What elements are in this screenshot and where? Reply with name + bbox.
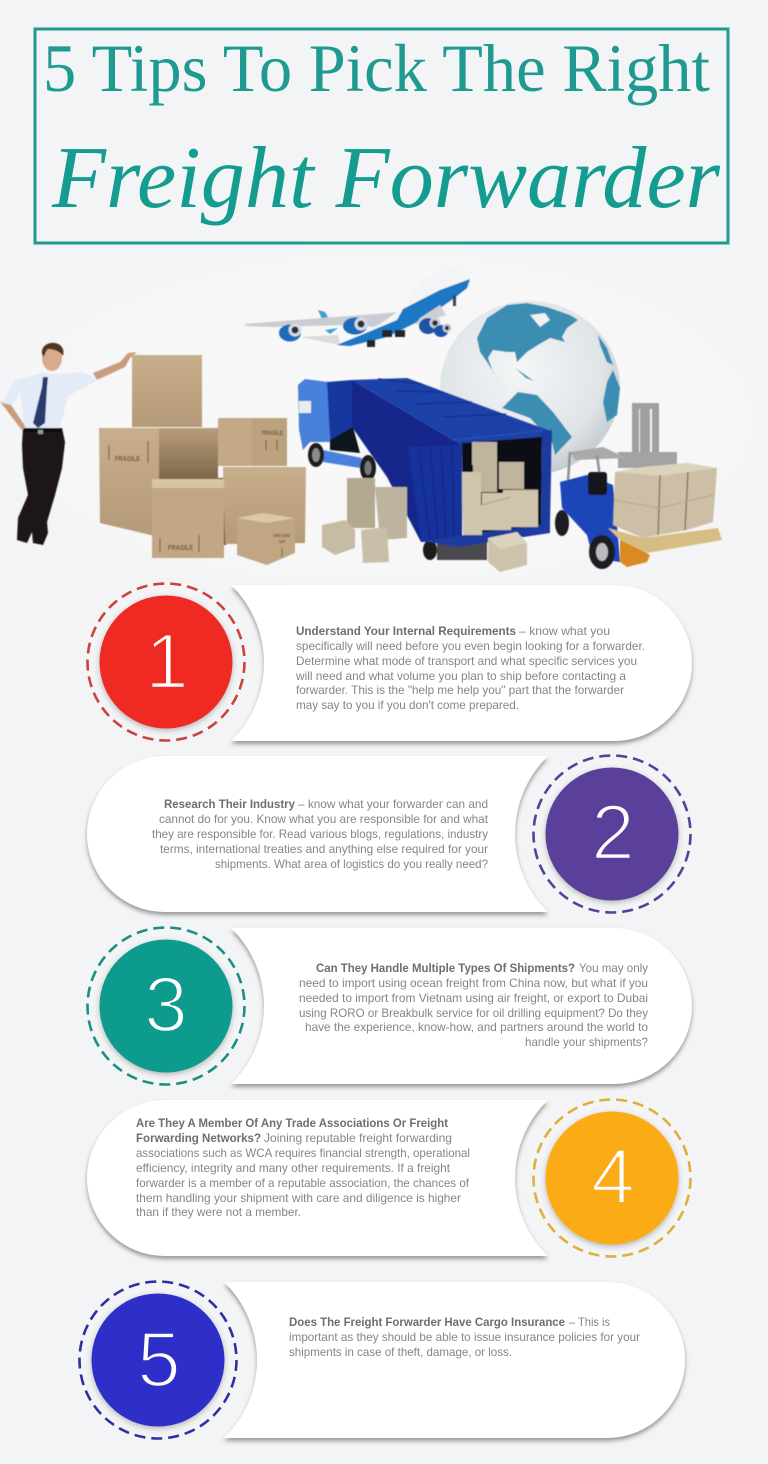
icon: globe [440, 301, 620, 475]
tip 1 text [295, 624, 645, 712]
number badge 3: 3 [144, 960, 188, 1048]
panel 3 [88, 928, 692, 1084]
tip 1 text: may say to you if you don't come prepared. [296, 698, 519, 712]
tip 3 text: needed to import from Vietnam using air freight, or export to Dubai [299, 991, 648, 1005]
tip 1 text: specifically will need before you even begin looking for a forwarder. [296, 639, 645, 653]
icon: forklift [555, 403, 722, 569]
tip 1 text: forwarder. This is the "help me help you" part that the forwarder [296, 683, 624, 697]
tip 2 text: they are responsible for. Read various blogs, regulations, industry [152, 827, 488, 841]
icon: cardboard boxes: UP [279, 539, 285, 544]
panel 5 [80, 1282, 685, 1438]
tip 2 text [152, 797, 489, 871]
tip 4 text: Joining reputable freight forwarding [264, 1131, 452, 1145]
number badge 5: 5 [137, 1315, 181, 1403]
tip 4 text: Are They A Member Of Any Trade Associations Or Freight [136, 1116, 448, 1130]
tip 2 text: terms, international treaties and anything else required for your [160, 842, 488, 856]
tip 4 text: than if they were not a member. [136, 1205, 301, 1219]
tip 3 text: You may only [579, 961, 648, 975]
tip 5 text: Does The Freight Forwarder Have Cargo Insurance [289, 1315, 565, 1329]
title box [35, 29, 728, 243]
tip 5 text: important as they should be able to issue insurance policies for your [289, 1330, 640, 1344]
tip 4 text: them handling your shipment with care and diligence is higher [136, 1191, 461, 1205]
box labels: FRAGILE [115, 456, 140, 463]
tip 4 text: associations such as WCA requires financial strength, operational [136, 1146, 470, 1160]
number badge 4: 4 [591, 1132, 635, 1220]
tip 5 text: shipments in case of theft, damage, or loss. [289, 1345, 512, 1359]
number badge 1 [88, 584, 244, 740]
logistics illustration [2, 267, 722, 572]
tip 3 text [299, 961, 648, 1049]
tip 3 text: have the experience, know-how, and partners around the world to [305, 1020, 648, 1034]
title line 2: Freight Forwarder [51, 130, 721, 227]
tip 2 text: Research Their Industry [164, 797, 295, 811]
tip 5 text [289, 1315, 640, 1359]
panel 4 [87, 1100, 690, 1256]
number badge 3 [88, 928, 244, 1084]
number badge 2: 2 [591, 788, 635, 876]
number badge 4 [534, 1100, 690, 1256]
tip 1 text: – know what you [519, 624, 610, 638]
tip 1 text: Determine what mode of transport and what specific services you [296, 654, 637, 668]
tip 4 text [136, 1116, 470, 1219]
tip 3 text: need to import using ocean freight from China now, but what if you [299, 976, 648, 990]
panel 2 [87, 756, 690, 912]
tip 3 text: handle your shipments? [525, 1035, 648, 1049]
tip 4 text: forwarder is a member of a reputable association, the chances of [136, 1176, 470, 1190]
tip 1 text: will need and what volume you plan to ship before contacting a [295, 669, 626, 683]
icon: cardboard boxes [99, 355, 306, 565]
tip 2 text: – know what your forwarder can and [298, 797, 488, 811]
tip 4 text: Forwarding Networks? [136, 1131, 261, 1145]
icon: cardboard boxes: FRAGILE [262, 431, 283, 437]
tip 3 text: Can They Handle Multiple Types Of Shipments? [316, 961, 575, 975]
tip 1 text: Understand Your Internal Requirements [296, 624, 516, 638]
icon: container truck [298, 378, 552, 560]
tip 3 text: using RORO or Breakbulk service for oil drilling equipment? Do they [299, 1006, 648, 1020]
icon: businessman [2, 343, 137, 545]
number badge 1: 1 [145, 617, 189, 705]
number badge 2 [534, 756, 690, 912]
icon: small boxes near truck [322, 478, 527, 572]
title line 1: 5 Tips To Pick The Right [43, 30, 710, 106]
icon: airplane [244, 267, 470, 347]
tip 4 text: efficiency, integrity and many other requirements. If a freight [136, 1161, 451, 1175]
tip 5 text: – This is [569, 1315, 610, 1329]
panel 1 [88, 584, 692, 741]
number badge 5 [80, 1282, 236, 1438]
icon: cardboard boxes: FRAGILE [168, 545, 193, 552]
tip 2 text: shipments. What area of logistics do you really need? [215, 857, 488, 871]
tip 2 text: cannot do for you. Know what you are responsible for and what [159, 812, 489, 826]
icon: cardboard boxes: THIS SIDE [273, 533, 290, 538]
